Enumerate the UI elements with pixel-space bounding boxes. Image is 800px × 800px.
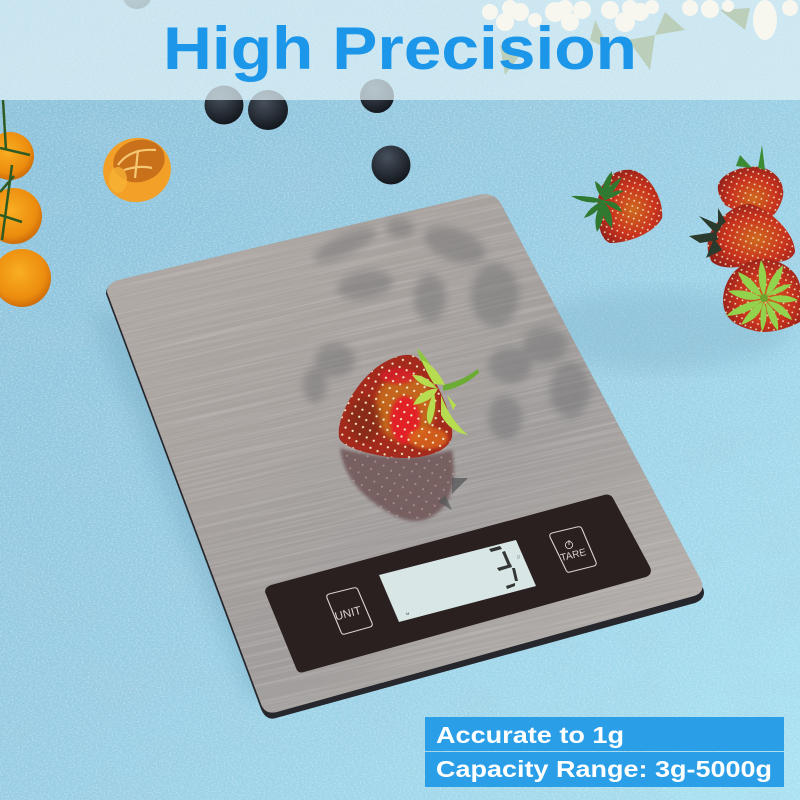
accuracy row: [425, 717, 784, 751]
tomato half: [96, 130, 178, 210]
leaf reflection on platform: [303, 218, 590, 440]
title: High Precision: [163, 15, 637, 82]
accuracy row: Accurate to 1g: [436, 722, 624, 748]
orange tomatoes: [0, 100, 51, 307]
unit button: UNIT: [334, 605, 363, 623]
LCD unit g: g: [517, 554, 520, 560]
strawberry middle: [689, 204, 795, 267]
scale shadow: [90, 310, 300, 700]
brushed finish: [116, 194, 699, 712]
kitchen scale: [106, 194, 704, 719]
right strawberries: [571, 145, 800, 332]
unit button: [327, 588, 372, 634]
blueberries: [122, 0, 410, 184]
capacity row: [425, 752, 784, 787]
strawberry left: [571, 170, 662, 243]
centre strawberry: [339, 348, 479, 458]
tare button: [550, 527, 596, 572]
LCD mode marker: M: [406, 611, 409, 616]
scale base edge: [106, 195, 704, 719]
LCD digit: [489, 546, 518, 589]
flowers: [482, 0, 798, 75]
spec box: [425, 717, 784, 787]
strawberry bottom: [723, 259, 800, 332]
strawberry top: [718, 145, 783, 224]
capacity row: Capacity Range: 3g-5000g: [436, 756, 772, 782]
steel platform: [107, 194, 702, 713]
tare button: TARE: [559, 547, 588, 564]
LCD display: [379, 540, 536, 622]
calyx: [412, 348, 479, 435]
top banner band: [0, 0, 800, 100]
control panel: [265, 495, 651, 672]
strawberry reflection: [340, 448, 468, 521]
seeds: [339, 355, 452, 458]
